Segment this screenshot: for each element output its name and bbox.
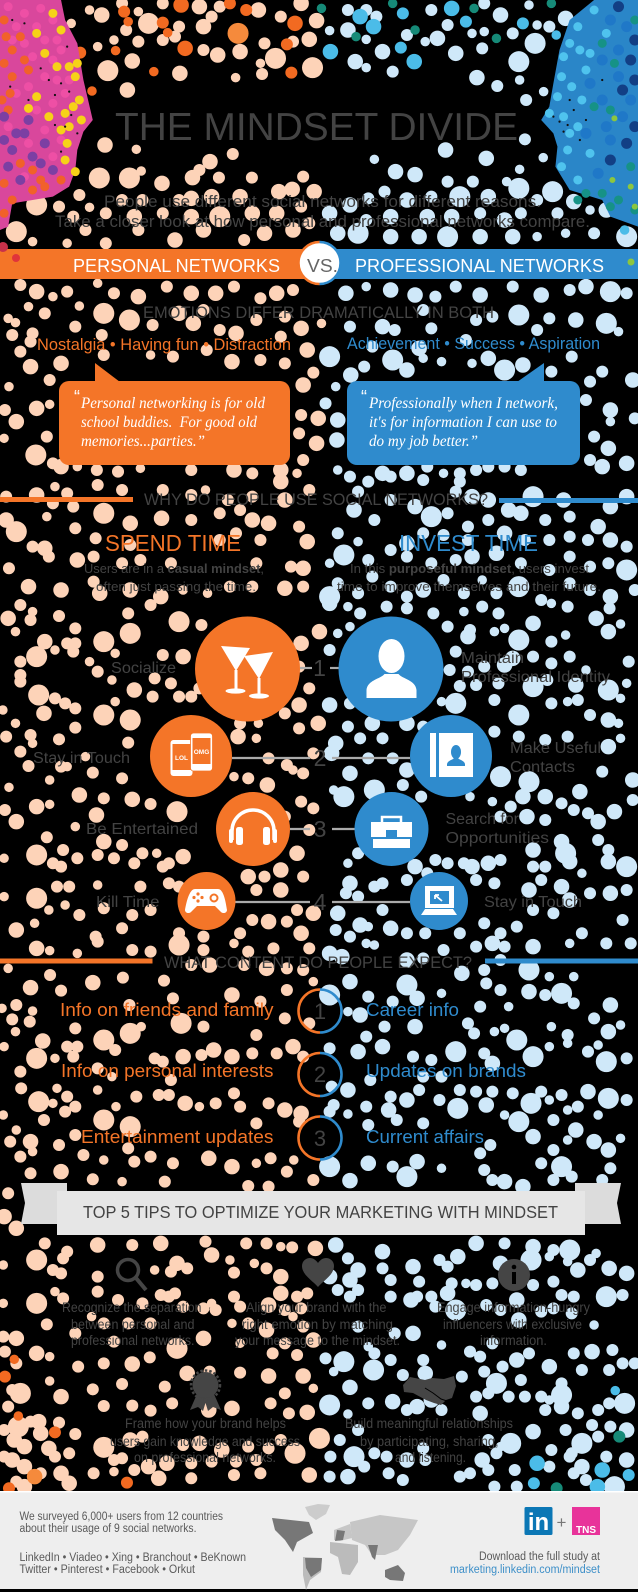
invest time column header: In this purposeful mindset , users invest: [350, 562, 590, 576]
spend time column header: [84, 530, 264, 594]
numbered rings: 1: [314, 999, 326, 1024]
icon: phones: OMG: [194, 749, 209, 756]
rank numbers: 3: [314, 816, 326, 842]
speech bubble: professional quote: it's for information I can use to: [369, 414, 557, 431]
world map: [272, 1504, 418, 1590]
tip 1: magnifier: [62, 1260, 202, 1348]
tip 3: information: influencers with exclusive: [443, 1317, 582, 1332]
left activity labels: Stay in Touch: [33, 750, 130, 767]
right activity labels: Make Useful: [510, 740, 601, 757]
tip 5: handshake: [345, 1376, 513, 1465]
rank numbers: 1: [313, 655, 326, 681]
numbered rings: [298, 990, 342, 1160]
survey text: LinkedIn • Viadeo • Xing • Branchout • BeKnown: [20, 1552, 246, 1564]
tip 3: information: [437, 1259, 590, 1348]
icon: person: [338, 616, 444, 722]
icon: headphones: [216, 792, 290, 866]
footer panel: [0, 1491, 638, 1589]
tip 2: heart: your message to the mindset.: [235, 1333, 400, 1348]
right activity labels: [446, 650, 610, 911]
survey text: [20, 1511, 246, 1576]
survey text: Twitter • Pinterest • Facebook • Orkut: [20, 1564, 196, 1576]
icon: address book: [410, 715, 492, 797]
speech bubble: personal quote: [59, 363, 290, 465]
section heading: what content: [0, 953, 638, 972]
tip 4: award ribbon: on professional networks.: [134, 1450, 276, 1465]
survey text: We surveyed 6,000+ users from 12 countries: [20, 1511, 223, 1523]
professional content list: Updates on brands: [366, 1060, 526, 1081]
title: THE MINDSET DIVIDE: [115, 106, 518, 149]
tips banner: [21, 1183, 621, 1235]
speech bubble: personal quote: Personal networking is for old: [80, 395, 265, 412]
versus bar: VS.: [307, 255, 338, 276]
speech bubble: professional quote: do my job better.”: [369, 433, 478, 450]
logos: LinkedIn plus TNS: TNS: [576, 1525, 596, 1536]
right activity labels: Stay in Touch: [484, 894, 582, 911]
tip 2: heart: right emotion by matching: [242, 1317, 393, 1332]
right activity labels: Opportunities: [446, 830, 549, 847]
rank numbers: 2: [314, 745, 326, 771]
tip 4: award ribbon: [110, 1370, 300, 1465]
icon: laptop: [410, 872, 468, 930]
speech bubble: professional quote: [347, 363, 580, 465]
section heading: why use social networks: WHY DO PEOPLE USE SOCIAL NETWORKS?: [144, 490, 488, 509]
icon: phones: [150, 715, 232, 797]
section heading: what content: WHAT CONTENT DO PEOPLE EXPECT?: [164, 953, 472, 972]
tips banner: TOP 5 TIPS TO OPTIMIZE YOUR MARKETING WITH MINDSET: [83, 1202, 558, 1222]
left activity labels: Socialize: [111, 660, 176, 677]
invest time column header: [337, 530, 601, 594]
speech bubble: personal quote: school buddies. For good old: [81, 414, 257, 431]
versus bar: [0, 242, 638, 284]
icon: phones: LOL: [175, 755, 188, 762]
tip 1: magnifier: between personal and: [71, 1317, 194, 1332]
speech bubble: professional quote: “: [361, 387, 367, 407]
icon: cocktail glasses: [195, 616, 300, 722]
spend time column header: often just passing the time.: [96, 580, 256, 594]
speech bubble: personal quote: “: [74, 387, 80, 407]
tip 3: information: information.: [480, 1333, 547, 1348]
spend time column header: SPEND TIME: [105, 530, 241, 556]
speech bubble: professional quote: Professionally when I network,: [368, 395, 558, 412]
left activity labels: Kill Time: [96, 894, 160, 911]
personal content list: Entertainment updates: [81, 1126, 274, 1147]
versus bar: PERSONAL NETWORKS: [73, 255, 280, 276]
icon: briefcase: [354, 792, 428, 866]
download call to action: marketing.linkedin.com/mindset: [450, 1564, 601, 1576]
personal content list: Info on friends and family: [60, 999, 274, 1020]
right activity labels: Professional Identity: [461, 669, 610, 686]
right head: blue dot profile facing left: [541, 0, 638, 227]
tip 1: magnifier: professional networks.: [71, 1333, 194, 1348]
personal content list: [60, 999, 274, 1147]
versus bar: PROFESSIONAL NETWORKS: [355, 255, 604, 276]
left head: colourful dot profile facing right: [0, 0, 93, 230]
tip 2: heart: [235, 1258, 400, 1348]
left activity labels: Be Entertained: [86, 821, 198, 838]
logos: LinkedIn plus TNS: +: [557, 1513, 567, 1532]
right activity labels: Search for: [446, 811, 519, 828]
section heading: why use social networks: [0, 490, 638, 509]
speech bubble: personal quote: memories...parties.”: [81, 433, 205, 450]
numbered rings: 3: [314, 1126, 326, 1151]
intro text: [55, 193, 590, 231]
tip 4: award ribbon: Frame how your brand helps: [125, 1416, 286, 1431]
numbered rings: 2: [314, 1062, 326, 1087]
tip 1: magnifier: Recognize the separation: [62, 1300, 202, 1315]
rank numbers: 4: [314, 889, 327, 915]
tip 2: heart: Align your brand with the: [246, 1300, 386, 1315]
left activity labels: [33, 660, 198, 911]
logos: LinkedIn plus TNS: in: [528, 1509, 549, 1536]
logos: LinkedIn plus TNS: [524, 1507, 600, 1536]
personal emotions: Nostalgia • Having fun • Distraction: [37, 336, 291, 354]
icon: game controller: [178, 872, 236, 930]
invest time column header: INVEST TIME: [399, 530, 538, 556]
professional content list: [366, 999, 526, 1147]
professional emotions: Achievement • Success • Aspiration: [347, 335, 600, 353]
spend time column header: Users are in a casual mindset,: [84, 562, 264, 576]
survey text: about their usage of 9 social networks.: [20, 1523, 196, 1535]
tip 5: handshake: by participating, sharing,: [360, 1434, 498, 1449]
invest time column header: time to improve themselves and their future.: [337, 580, 601, 594]
professional content list: Current affairs: [366, 1126, 484, 1147]
tip 5: handshake: Build meaningful relationships: [345, 1416, 513, 1431]
rank numbers: [313, 655, 327, 915]
professional content list: Career info: [366, 999, 459, 1020]
tip 4: award ribbon: users gain knowledge and success: [110, 1434, 300, 1449]
connector lines: [232, 668, 410, 902]
download call to action: Download the full study at: [479, 1551, 601, 1563]
right activity labels: Maintain: [461, 650, 524, 667]
intro text: People use different social networks for different reasons.: [104, 193, 541, 211]
intro text: Take a closer look at how personal and professional networks compare.: [55, 213, 590, 231]
tip 3: information: Engage information-hungry: [437, 1300, 590, 1315]
emotions heading: EMOTIONS DIFFER DRAMATICALLY IN BOTH: [143, 303, 494, 322]
tip 5: handshake: and listening.: [395, 1450, 466, 1465]
personal content list: Info on personal interests: [61, 1060, 274, 1081]
download call to action: [450, 1551, 601, 1576]
right activity labels: Contacts: [510, 759, 575, 776]
